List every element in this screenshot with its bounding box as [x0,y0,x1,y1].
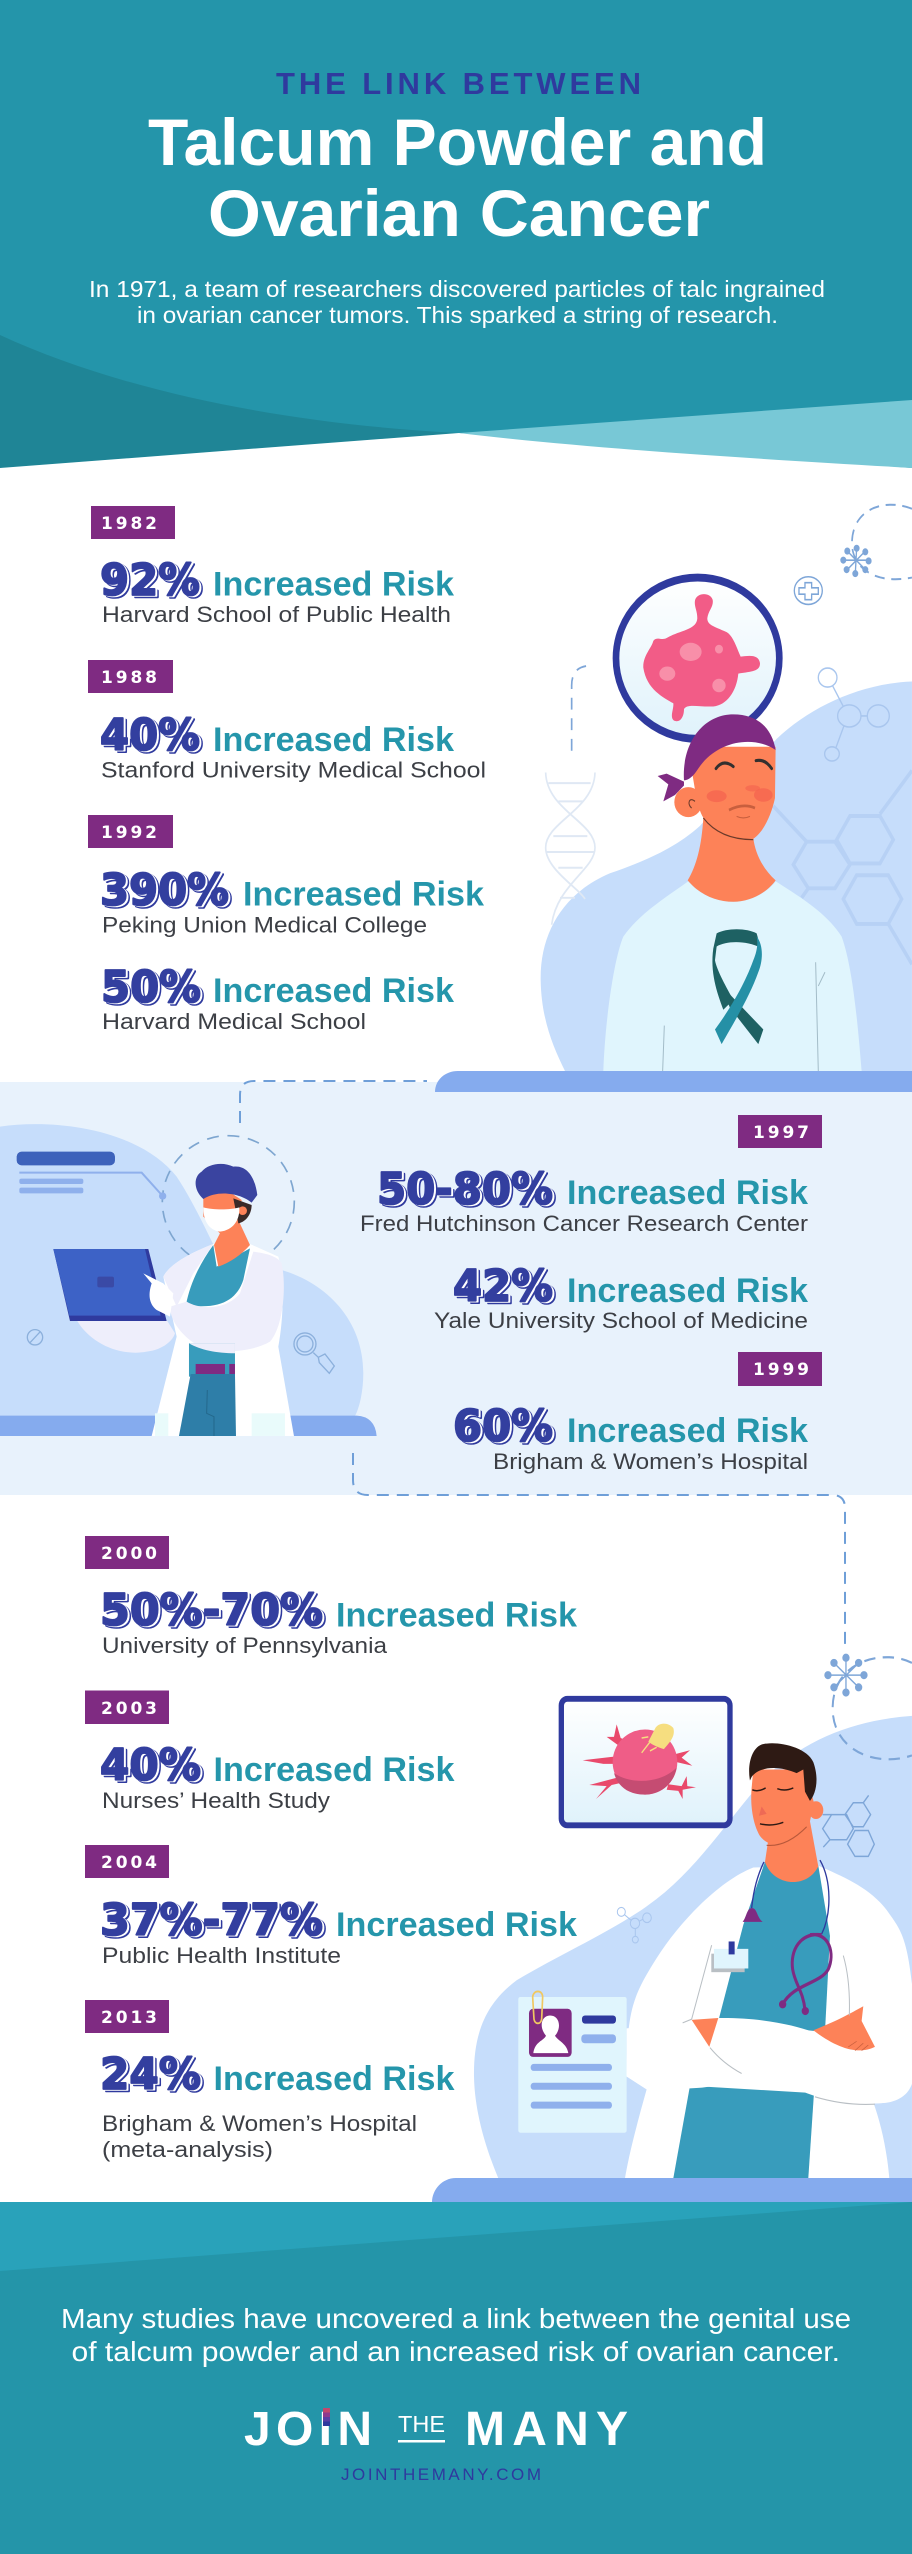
risk figure: 92% [102,556,202,607]
closing statement [61,2303,851,2367]
face [203,1190,242,1233]
year badge [85,1845,169,1878]
doctor figure [625,1743,912,2178]
year badge [88,815,173,848]
back hair [233,1198,252,1223]
face [751,1769,814,1845]
risk label: Increased Risk [567,1412,808,1450]
source: Yale University School of Medicine [434,1308,808,1333]
crossed arms [627,2018,912,2104]
blob [474,1716,912,2178]
risk figure: 50% [103,963,203,1014]
year badge [85,1536,169,1569]
source [102,2111,417,2162]
year badge [738,1352,822,1386]
intro text: In 1971, a team of researchers discovered particles of talc ingrained [89,276,825,302]
risk figure: 92% [100,555,200,606]
risk label: Increased Risk [213,566,454,604]
hair [749,1743,817,1801]
mask [203,1207,239,1232]
risk figure: 40% [100,710,200,761]
title: Talcum Powder and [148,105,767,179]
year badge: 1982 [101,514,157,534]
coat arm [170,1252,284,1351]
year badge: 1992 [101,823,157,843]
risk figure: 390% [102,866,231,917]
risk figure: 50-80% [379,1165,555,1216]
illustration: doctor with tablet [0,1124,377,1436]
doctor figure [53,1164,294,1436]
blob background [541,682,912,1071]
source: Nurses’ Health Study [102,1788,330,1813]
source: Brigham & Women’s Hospital [493,1449,808,1474]
hexagons [773,771,912,964]
scrubs lower [189,1343,235,1377]
source: Public Health Institute [102,1943,341,1968]
risk figure: 42% [455,1262,555,1313]
risk label: Increased Risk [567,1272,808,1310]
risk figure: 37%-77% [103,1897,326,1948]
panel: light blue band [0,1082,912,1495]
risk label: Increased Risk [214,2060,455,2098]
logo: THE [398,2411,445,2437]
year badge: 1999 [753,1360,809,1380]
scrubs top [186,1245,250,1306]
intro text [89,276,825,328]
study: 2013 [85,2000,455,2162]
year badge [85,1690,169,1724]
badge [711,1954,745,1972]
panel: header [0,0,912,472]
intro text: in ovarian cancer tumors. This sparked a string of research. [137,302,778,328]
document card [518,1991,627,2133]
footer light wedge [0,2202,912,2271]
lab coat [152,1244,294,1436]
ribbon [712,929,763,1044]
framed tumor [561,1699,730,1825]
tumor bubble [616,578,779,739]
illustration: doctor with stethoscope [474,1654,912,2178]
risk figure: 24% [102,2050,203,2101]
risk figure: 37%-77% [102,1896,325,1947]
neck [688,818,776,902]
study: 2004 [85,1845,577,1968]
plus icon [794,577,822,604]
risk label: Increased Risk [214,1751,455,1789]
risk figure: 24% [103,2051,204,2102]
scrubs [718,1862,830,2032]
molecule [818,668,889,761]
risk figure: 60% [455,1402,555,1453]
risk figure: 50%-70% [100,1585,323,1636]
risk figure: 24% [100,2049,201,2100]
year badge [91,506,175,539]
bandana [684,714,776,780]
risk figure: 50% [101,962,201,1013]
study: 1988 [88,660,486,782]
eyebrow heading: THE LINK BETWEEN [276,66,641,101]
risk label: Increased Risk [213,972,454,1010]
panel: footer [0,2202,912,2554]
closing statement: Many studies have uncovered a link between the genital use [61,2303,851,2334]
source: Brigham & Women’s Hospital [102,2111,417,2136]
year badge [88,660,173,693]
tablet [53,1249,167,1321]
risk figure: 50%-70% [103,1587,326,1638]
dashed circle and virus icon [841,505,912,579]
illustration: patient with ribbon [541,505,912,1071]
year badge: 2004 [101,1853,157,1873]
source: Harvard School of Public Health [102,602,451,627]
source: Fred Hutchinson Cancer Research Center [360,1211,808,1236]
neck [765,1821,818,1882]
risk figure: 92% [103,557,203,608]
hexagon molecule [823,1795,874,1856]
risk figure: 40% [100,1740,201,1791]
source: Harvard Medical School [102,1009,366,1034]
cap [196,1164,257,1203]
study: Harvard Medical School [101,962,454,1034]
neck [214,1220,250,1267]
risk figure: 390% [103,867,232,918]
risk figure: 50%-70% [102,1586,325,1637]
icon: pill [27,1330,43,1345]
label lines [17,1152,166,1200]
risk label: Increased Risk [336,1596,577,1634]
lab coat [625,1866,912,2178]
year badge: 2000 [101,1544,157,1564]
header wave: dark [0,335,459,468]
closing statement: of talcum powder and an increased risk of ovarian cancer. [72,2336,840,2367]
study: 1992 [88,815,484,938]
risk figure: 60% [456,1403,556,1454]
risk figure: 40% [102,711,202,762]
dashed circle and virus icon [825,1654,912,1759]
ear [674,787,702,817]
bar: top counter [435,1071,912,1092]
logo [244,2403,628,2456]
risk figure: 40% [103,712,203,763]
risk figure: 42% [456,1263,556,1314]
risk figure: 50-80% [380,1166,556,1217]
belt [196,1364,225,1374]
icon: magnifier [294,1333,334,1373]
bar: bottom counter [432,2178,912,2202]
shirt [603,881,862,1071]
source: University of Pennsylvania [102,1633,388,1658]
risk figure: 50% [104,964,204,1015]
risk label: Increased Risk [213,721,454,759]
patient figure [603,714,862,1071]
dashed connector: top [240,1081,427,1123]
study: 1999 [453,1352,822,1474]
source: (meta-analysis) [102,2137,273,2162]
year badge: 2013 [101,2008,157,2028]
risk figure: 42% [453,1261,553,1312]
risk figure: 390% [100,865,229,916]
dashed circle [162,1136,294,1268]
year badge [85,2000,169,2033]
year badge: 1988 [101,668,157,688]
coat creases [683,1945,875,2104]
year badge: 2003 [101,1699,157,1719]
dashed connector: long [353,1453,845,1650]
desk bar [0,1416,377,1436]
header wave: light [459,400,912,468]
stethoscope [743,1860,831,2015]
risk label: Increased Risk [243,876,484,914]
DNA helix [546,772,595,925]
study: Yale [434,1261,808,1333]
logo: MANY [465,2403,628,2456]
risk figure: 40% [102,1741,203,1792]
blob [0,1124,363,1416]
risk figure: 50-80% [377,1164,553,1215]
lower left arm [77,1320,175,1353]
title [148,105,767,250]
study: 1982 [91,506,454,627]
risk figure: 60% [453,1401,553,1452]
title: Ovarian Cancer [208,176,710,250]
source: Peking Union Medical College [102,912,427,938]
year badge: 1997 [753,1123,809,1143]
coat pockets [155,1413,168,1436]
hand [143,1273,173,1317]
molecule: small [617,1907,651,1943]
face [692,747,776,840]
website: JOINTHEMANY.COM [341,2465,541,2484]
logo: JOIN [244,2403,372,2456]
year badge [738,1115,822,1148]
pants [179,1374,236,1436]
source: Stanford University Medical School [101,758,486,782]
study: 1997 [360,1115,822,1236]
dashed connector [572,666,591,751]
study: 2000 [85,1536,577,1658]
study: 2003 [85,1690,455,1813]
risk figure: 40% [103,1742,204,1793]
risk figure: 37%-77% [100,1895,323,1946]
risk label: Increased Risk [567,1174,808,1212]
risk label: Increased Risk [336,1906,577,1944]
